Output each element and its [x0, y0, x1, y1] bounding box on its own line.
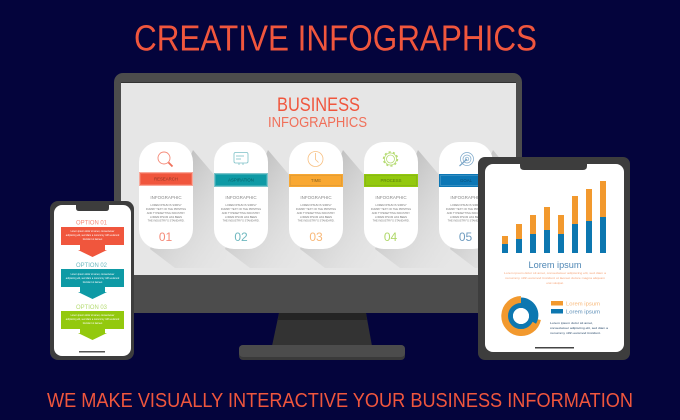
option 3: OPTION 03: [76, 304, 107, 311]
body text: AND TYPESETTING INDUSTRY.: [447, 211, 486, 215]
phone body: [50, 201, 134, 360]
option 2: [61, 262, 124, 299]
option 2: OPTION 02: [76, 262, 107, 269]
option 3 text: adipiscing elit, sed diam a nonummy nibh euismod: [66, 318, 120, 321]
monitor screen: [121, 82, 516, 275]
legend note: consectetuer adipiscing elit, sed diam a: [550, 326, 608, 330]
body text: [371, 203, 411, 222]
body text: AND TYPESETTING INDUSTRY.: [372, 211, 411, 215]
option 1: [61, 220, 124, 257]
option 1 text: [66, 230, 120, 241]
body text: AND TYPESETTING INDUSTRY.: [147, 211, 186, 215]
donut legend: Lorem ipsum: [566, 302, 600, 308]
card 4: process: [364, 142, 452, 268]
legend note: nonummy nibh euismod tincidunt.: [550, 331, 601, 335]
body text: LOREM IPSUM HAS BEEN: [225, 215, 257, 219]
body text: AND TYPESETTING INDUSTRY.: [297, 211, 336, 215]
chart caption: Lorem ipsum dolor sit amet, consectetuer adipiscing elit, sed diam a: [504, 271, 606, 275]
band: process: PROCESS: [380, 178, 402, 183]
icon: monitor: [234, 152, 248, 165]
body text: [296, 203, 336, 222]
option 1: OPTION 01: [76, 220, 107, 226]
band: research: RESEARCH: [154, 176, 178, 182]
monitor stand: [272, 313, 372, 346]
tablet body: [478, 157, 630, 360]
option 2 text: [66, 273, 120, 284]
chart caption: nonummy nibh euismod tincidunt ut laoreet dolore magna aliquam: [505, 276, 606, 280]
card 5: goal: INFOGRAPHIC: [450, 195, 482, 200]
tablet screen: [485, 164, 624, 352]
body text: DUMMY TEXT OF THE PRINTING: [221, 207, 261, 211]
tablet: [478, 157, 630, 360]
title: CREATIVE INFOGRAPHICS: [134, 18, 537, 58]
phone home bar: [79, 351, 105, 352]
phone screen: [54, 205, 131, 356]
icon: magnifier: [158, 152, 172, 166]
tablet notch: [520, 164, 587, 170]
icon: gear: [384, 152, 398, 166]
donut legend: [551, 301, 600, 316]
card 2: aspiration: INFOGRAPHIC: [225, 195, 257, 200]
monitor base: [239, 345, 405, 360]
legend note: Lorem ipsum dolor sit amet,: [550, 321, 593, 325]
donut chart: [506, 301, 536, 331]
body text: DUMMY TEXT OF THE PRINTING: [371, 207, 411, 211]
card 2: aspiration: 02: [234, 230, 248, 244]
card 1: research: INFOGRAPHIC: [150, 195, 182, 200]
body text: LOREM IPSUM HAS BEEN: [375, 215, 407, 219]
option 3 text: Lorem ipsum dolor sit amet, consectetuer: [71, 314, 115, 317]
body text: THE INDUSTRY'S STANDARD.: [148, 218, 185, 222]
body text: THE INDUSTRY'S STANDARD.: [373, 218, 410, 222]
body text: AND TYPESETTING INDUSTRY.: [222, 211, 261, 215]
body text: LOREM IPSUM HAS BEEN: [150, 215, 182, 219]
screen heading: INFOGRAPHICS: [268, 114, 367, 131]
band: time: TIME: [311, 178, 321, 183]
body text: THE INDUSTRY'S STANDARD.: [448, 218, 485, 222]
card 4: process: INFOGRAPHIC: [375, 195, 407, 200]
card 5: goal: [439, 142, 516, 268]
chart heading: Lorem ipsum: [528, 260, 582, 271]
screen heading: BUSINESS: [277, 94, 360, 116]
legend note: [550, 321, 608, 335]
body text: LOREM IPSUM IS SIMPLY: [225, 203, 257, 207]
card 3: time: 03: [309, 230, 323, 244]
band: goal: GOAL: [460, 178, 473, 183]
body text: LOREM IPSUM IS SIMPLY: [150, 203, 182, 207]
chart caption: erat volutpat.: [546, 281, 564, 285]
card 1: research: [139, 142, 227, 268]
icon: clock: [308, 152, 323, 166]
monitor: [114, 73, 522, 360]
option 2 text: Lorem ipsum dolor sit amet, consectetuer: [71, 273, 115, 276]
body text: THE INDUSTRY'S STANDARD.: [298, 218, 335, 222]
body text: DUMMY TEXT OF THE PRINTING: [296, 207, 336, 211]
donut legend: Lorem ipsum: [566, 310, 600, 316]
option 2 text: adipiscing elit, sed diam a nonummy nibh euismod: [66, 277, 120, 280]
option 1 text: tincidunt ut laoreet: [83, 238, 103, 241]
body text: DUMMY TEXT OF THE PRINTING: [446, 207, 486, 211]
option 1 text: adipiscing elit, sed diam a nonummy nibh euismod: [66, 234, 120, 237]
body text: LOREM IPSUM HAS BEEN: [450, 215, 482, 219]
icon: target: [460, 152, 474, 166]
card 4: process: 04: [384, 230, 397, 244]
body text: LOREM IPSUM HAS BEEN: [300, 215, 332, 219]
option 3: [61, 304, 124, 340]
card 3: time: [289, 142, 377, 268]
card 2: aspiration: [214, 142, 302, 268]
bar chart: [502, 181, 606, 253]
tablet home bar: [535, 347, 574, 348]
body text: LOREM IPSUM IS SIMPLY: [300, 203, 332, 207]
option 3 text: tincidunt ut laoreet: [83, 322, 103, 325]
card 5: goal: 05: [459, 230, 472, 244]
body text: LOREM IPSUM IS SIMPLY: [450, 203, 482, 207]
body text: THE INDUSTRY'S STANDARD.: [223, 218, 260, 222]
option 1 text: Lorem ipsum dolor sit amet, consectetuer: [71, 230, 115, 233]
chart caption: [504, 271, 606, 285]
card 3: time: INFOGRAPHIC: [300, 195, 332, 200]
phone notch: [76, 205, 109, 211]
band: aspiration: ASPIRATION: [228, 178, 254, 182]
body text: [446, 203, 486, 222]
body text: LOREM IPSUM IS SIMPLY: [375, 203, 407, 207]
phone: [50, 201, 134, 360]
screen heading: [268, 94, 367, 131]
option 3 text: [66, 314, 120, 325]
card 1: research: 01: [159, 230, 172, 244]
monitor frame: [114, 73, 522, 313]
body text: DUMMY TEXT OF THE PRINTING: [146, 207, 186, 211]
body text: [146, 203, 186, 222]
option 2 text: tincidunt ut laoreet: [83, 281, 103, 284]
body text: [221, 203, 261, 222]
